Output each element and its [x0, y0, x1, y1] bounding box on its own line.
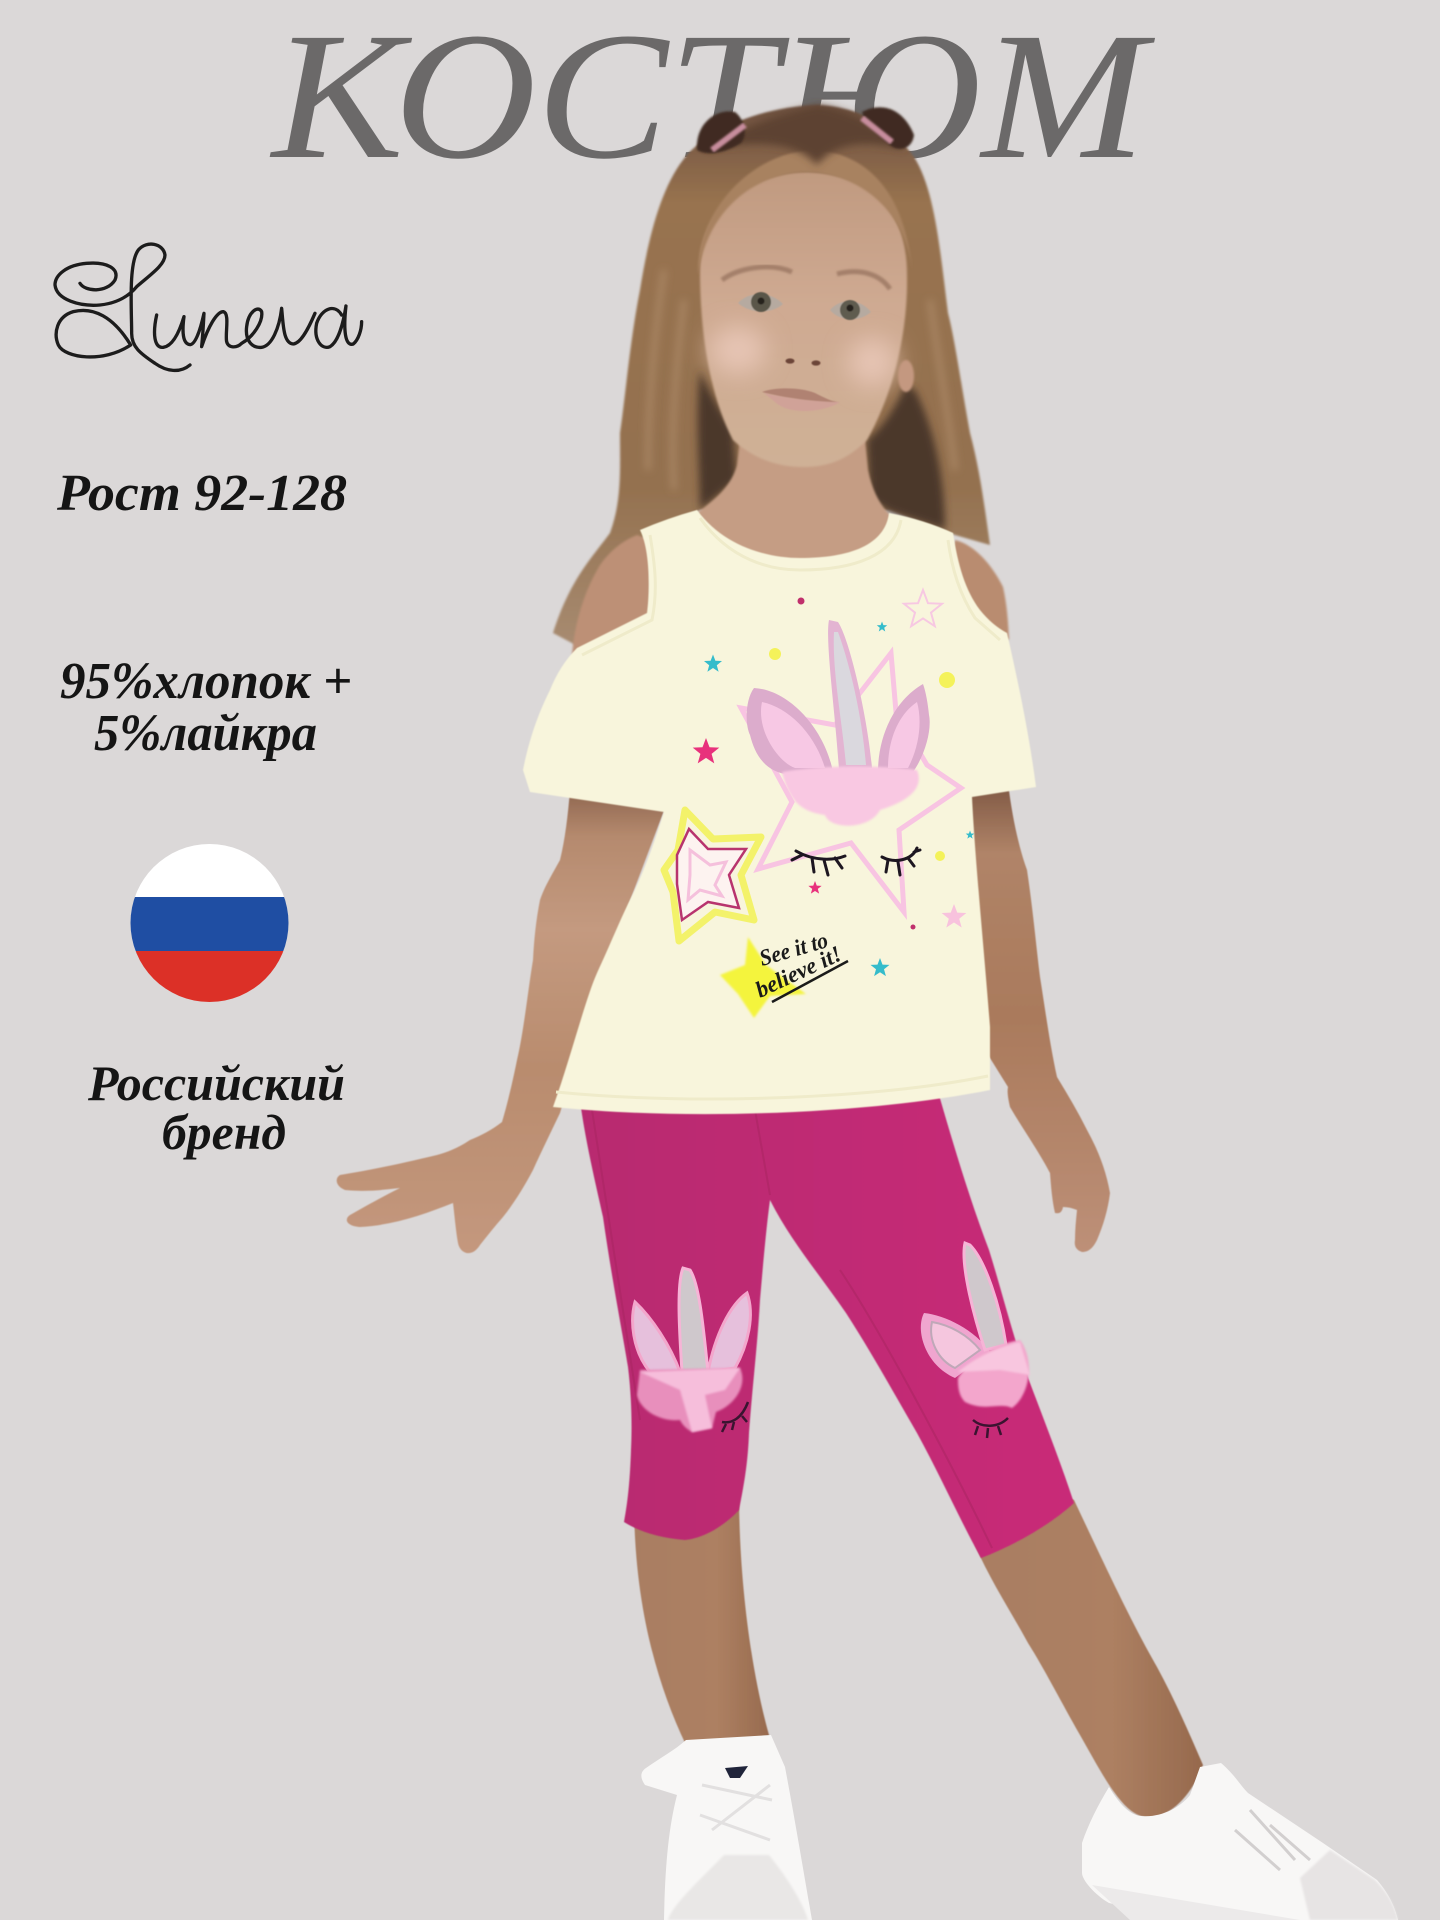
right leg	[975, 1490, 1203, 1817]
left arm and hand	[337, 790, 668, 1253]
dark hair beside neck	[698, 370, 945, 530]
shirt print: slogan on yellow star	[720, 927, 848, 1018]
legging seams	[592, 1110, 992, 1548]
text: Russian brand	[87, 1055, 345, 1160]
back hair	[553, 105, 990, 650]
right knee unicorn patch	[921, 1243, 1030, 1438]
shirt print: small stars and dots	[693, 590, 974, 976]
text: height range: Рост 92-128	[56, 465, 347, 522]
icon: Russian flag circle	[130, 843, 290, 1005]
right sneaker	[1082, 1763, 1398, 1920]
nose	[786, 358, 820, 366]
shirt neckline and hem trim	[556, 518, 1000, 1099]
left shoulder	[572, 535, 650, 655]
right shoulder	[950, 540, 1009, 640]
shirt print: sleepy eyes	[792, 848, 920, 875]
left eye	[738, 292, 783, 312]
face	[698, 150, 914, 467]
shirt print: large pink star outline	[741, 653, 961, 912]
text: fabric composition: 95%хлопок +	[60, 653, 352, 710]
title: КОСТЮМ	[269, 0, 1155, 197]
mouth	[762, 388, 840, 411]
text: Russian brand: бренд	[162, 1104, 286, 1160]
girl model	[337, 105, 1398, 1920]
brand logo: Luneva script	[55, 244, 362, 370]
shirt print: slogan on yellow star: believe it!	[752, 941, 845, 1003]
shirt print: unicorn ears and horn	[747, 620, 930, 826]
right arm and hand	[965, 783, 1110, 1252]
neck and chest	[695, 440, 890, 570]
right hair bun with pink band	[862, 107, 914, 149]
hair parting	[705, 105, 905, 165]
left knee unicorn patch	[633, 1268, 750, 1432]
eyebrows	[722, 267, 890, 289]
text: fabric composition	[60, 653, 352, 762]
left hair bun with pink band	[697, 111, 745, 153]
left sneaker	[641, 1735, 812, 1920]
text: fabric composition: 5%лайкра	[94, 705, 317, 762]
text: Russian brand: Российский	[87, 1055, 345, 1111]
right eye	[830, 300, 871, 320]
hair strands	[648, 270, 955, 490]
hairline	[698, 150, 912, 275]
shirt print: yellow and pink star	[664, 810, 761, 941]
cheek highlights	[710, 326, 896, 386]
ear	[898, 360, 914, 392]
left leg	[634, 1500, 772, 1745]
capri leggings	[580, 1095, 1074, 1558]
cold-shoulder t-shirt	[523, 510, 1036, 1114]
shirt print: slogan on yellow star: See it to	[756, 927, 831, 971]
